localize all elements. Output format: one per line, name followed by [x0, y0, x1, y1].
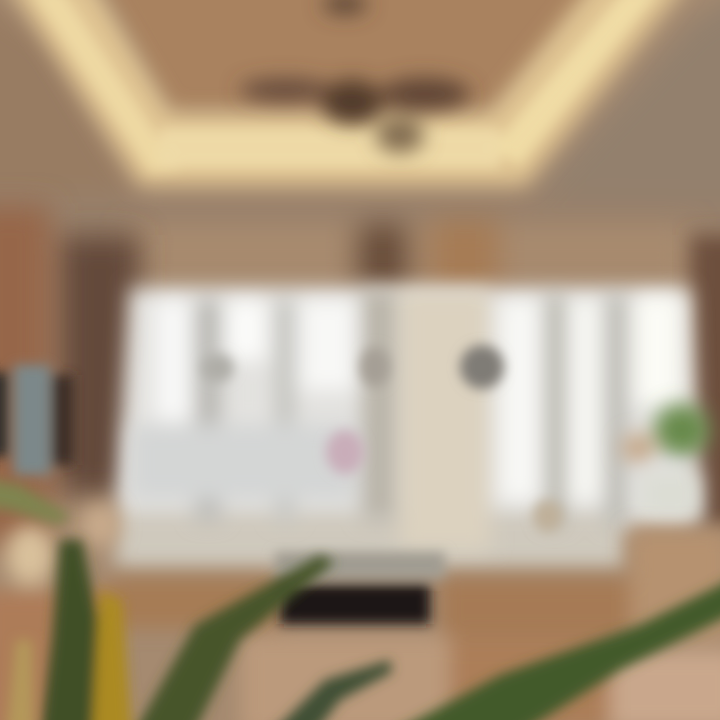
- TV console: [275, 552, 445, 624]
- ceiling side panels: [0, 0, 720, 240]
- wall band above window: [130, 220, 690, 290]
- cove light highlights: [30, 0, 660, 172]
- window details: [202, 345, 563, 532]
- floor and lower wall: [0, 503, 720, 720]
- ceiling lamp fixture: [240, 0, 470, 153]
- cove light band: [5, 0, 690, 185]
- window mullions and glass: [130, 290, 680, 550]
- foreground plant leaves: [0, 478, 720, 720]
- left dark object: [0, 365, 74, 475]
- left wall and curtain: [0, 205, 140, 545]
- plant by right window: [622, 404, 710, 517]
- right curtain: [690, 235, 720, 525]
- ceiling centre panel: [112, 0, 577, 107]
- window area: [115, 288, 700, 568]
